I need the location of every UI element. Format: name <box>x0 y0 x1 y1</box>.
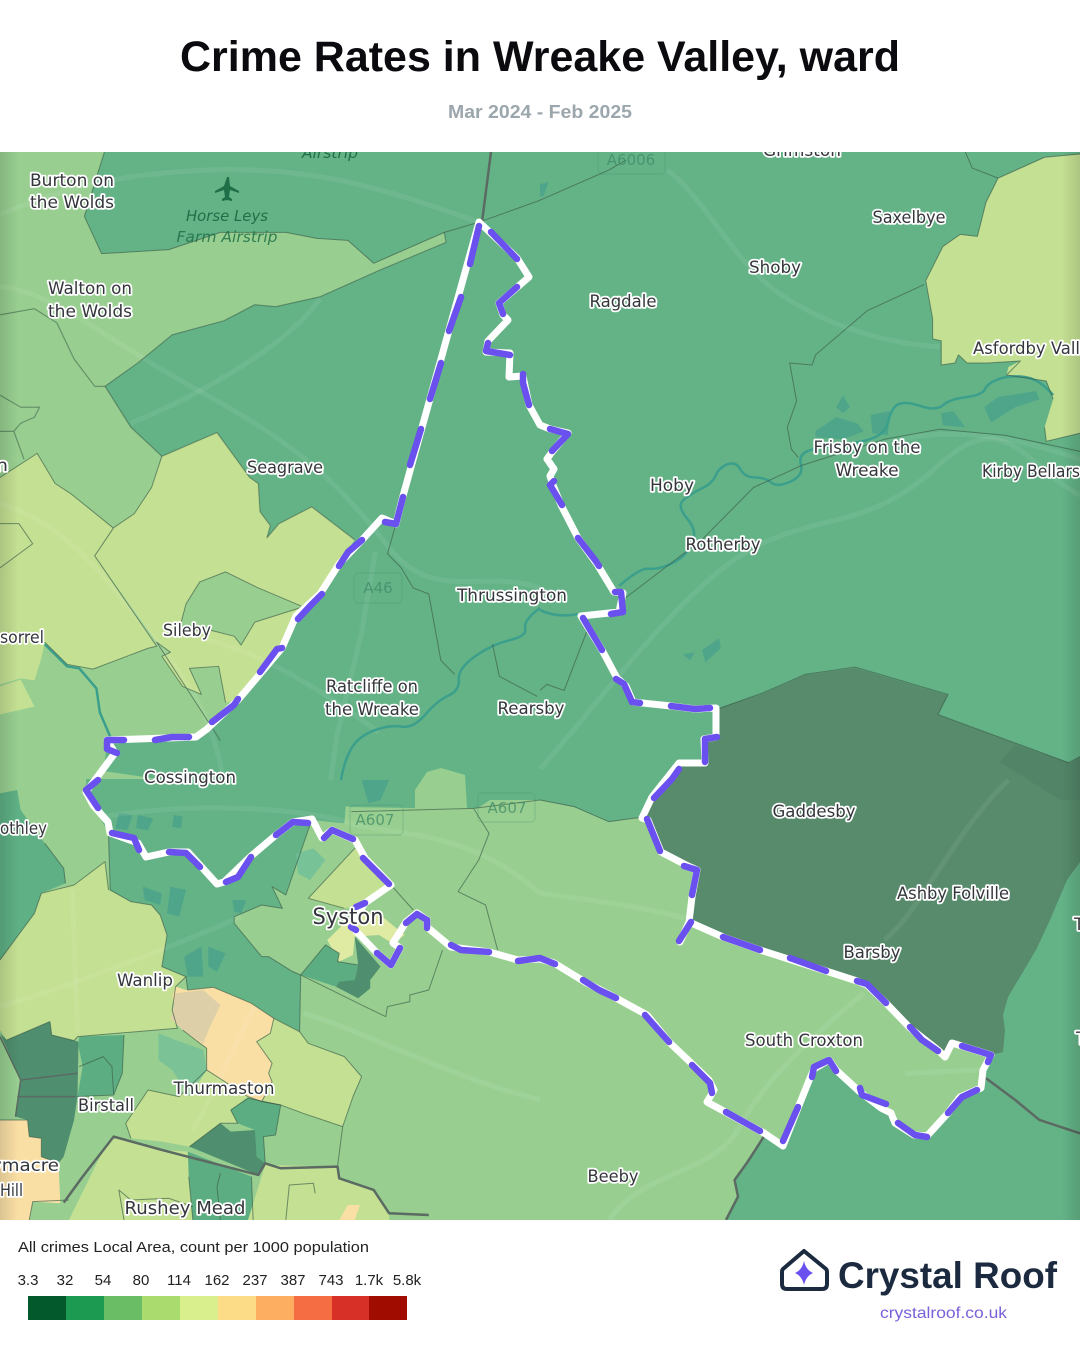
place labels: Wreake <box>836 461 898 480</box>
region: Sileby inset <box>179 572 303 645</box>
place labels: Birstall <box>78 1096 134 1115</box>
region: south light-green area <box>0 768 991 1220</box>
place labels: Sileby <box>163 621 211 640</box>
place labels: the Wreake <box>325 700 419 719</box>
airstrip labels <box>176 144 358 246</box>
legend values: 237 <box>242 1272 268 1289</box>
place labels: Barsby <box>844 943 901 962</box>
place labels: Seagrave <box>247 458 323 477</box>
place labels: Ragdale <box>590 292 656 311</box>
region: Gaddesby dark ward area <box>642 668 1080 1057</box>
legend values: 114 <box>167 1272 191 1289</box>
place labels: Rotherby <box>686 535 761 554</box>
place labels: sorrel <box>0 628 44 647</box>
place labels: Grimston <box>763 141 841 160</box>
place labels: Beeby <box>588 1167 639 1186</box>
legend values: 80 <box>133 1272 149 1289</box>
legend <box>18 1239 422 1320</box>
place labels: Thurmaston <box>172 1079 274 1098</box>
airstrip labels: Farm Airstrip <box>176 228 278 246</box>
place labels: Ratcliffe on <box>326 677 418 696</box>
place labels: Rearsby <box>498 699 565 718</box>
place labels: Rushey Mead <box>124 1198 246 1219</box>
place labels: Walton on <box>48 279 132 298</box>
logo wordmark: Crystal Roof <box>838 1255 1058 1296</box>
road shields: A607 <box>356 811 394 829</box>
legend title: All crimes Local Area, count per 1000 population <box>18 1239 369 1256</box>
edge shading <box>0 152 1080 1220</box>
place labels: Cossington <box>144 768 236 787</box>
legend values: 1.7k <box>355 1272 384 1289</box>
airstrip labels: Horse Leys <box>186 207 268 225</box>
place labels: Hill <box>0 1181 23 1200</box>
place labels: Syston <box>312 904 384 930</box>
place labels <box>0 141 1080 1219</box>
legend values: 162 <box>204 1272 230 1289</box>
place labels: Ashby Folville <box>897 884 1009 903</box>
airstrip labels: Airstrip <box>301 144 358 162</box>
place labels: Burton on <box>30 171 114 190</box>
place labels: Gaddesby <box>772 802 856 821</box>
place labels: Saxelbye <box>872 208 946 227</box>
region: north-west light band <box>0 150 446 781</box>
road shields: A607 <box>488 799 526 817</box>
legend colour scale <box>28 1296 407 1320</box>
ward boundary outline <box>86 222 991 1146</box>
road shields <box>350 146 665 835</box>
subtitle: date range: Mar 2024 - Feb 2025 <box>448 101 632 122</box>
place labels: Thrussington <box>456 586 567 605</box>
title: Crime Rates in Wreake Valley, ward <box>180 33 900 81</box>
place labels: Wanlip <box>117 971 173 990</box>
legend values: 32 <box>57 1272 73 1289</box>
icon: airport plane <box>215 177 239 201</box>
legend values: 54 <box>95 1272 111 1289</box>
ward boundary purple dashes <box>86 226 991 1141</box>
region: Cossington ward west of Syston <box>86 779 348 1032</box>
place labels: the Wolds <box>48 302 132 321</box>
place labels: Asfordby Vall <box>973 339 1080 358</box>
river Wreake <box>45 376 1053 780</box>
choropleth map <box>0 141 1080 1220</box>
icon: house with star <box>782 1251 827 1289</box>
area boundaries <box>0 150 1080 1220</box>
logo url: crystalroof.co.uk <box>880 1305 1008 1322</box>
place labels: othley <box>0 819 47 838</box>
place labels: Hoby <box>650 476 694 495</box>
road shields: A46 <box>363 579 393 597</box>
legend values: 743 <box>318 1272 344 1289</box>
road network <box>73 152 1080 986</box>
legend values: 3.3 <box>18 1272 38 1289</box>
place labels: Shoby <box>749 258 801 277</box>
logo: Crystal Roof <box>782 1251 1058 1322</box>
place labels: the Wolds <box>30 193 114 212</box>
road shields: A6006 <box>607 151 655 169</box>
legend values <box>18 1272 422 1289</box>
region: east yellow-green Asfordby <box>926 154 1080 441</box>
place labels: South Croxton <box>745 1031 863 1050</box>
region: Seagrave and Sileby <box>0 432 355 715</box>
place labels: Frisby on the <box>814 438 920 457</box>
wards: Syston to Leicester <box>0 790 405 1220</box>
legend values: 5.8k <box>393 1272 422 1289</box>
legend values: 387 <box>280 1272 306 1289</box>
water bodies <box>115 182 1039 977</box>
